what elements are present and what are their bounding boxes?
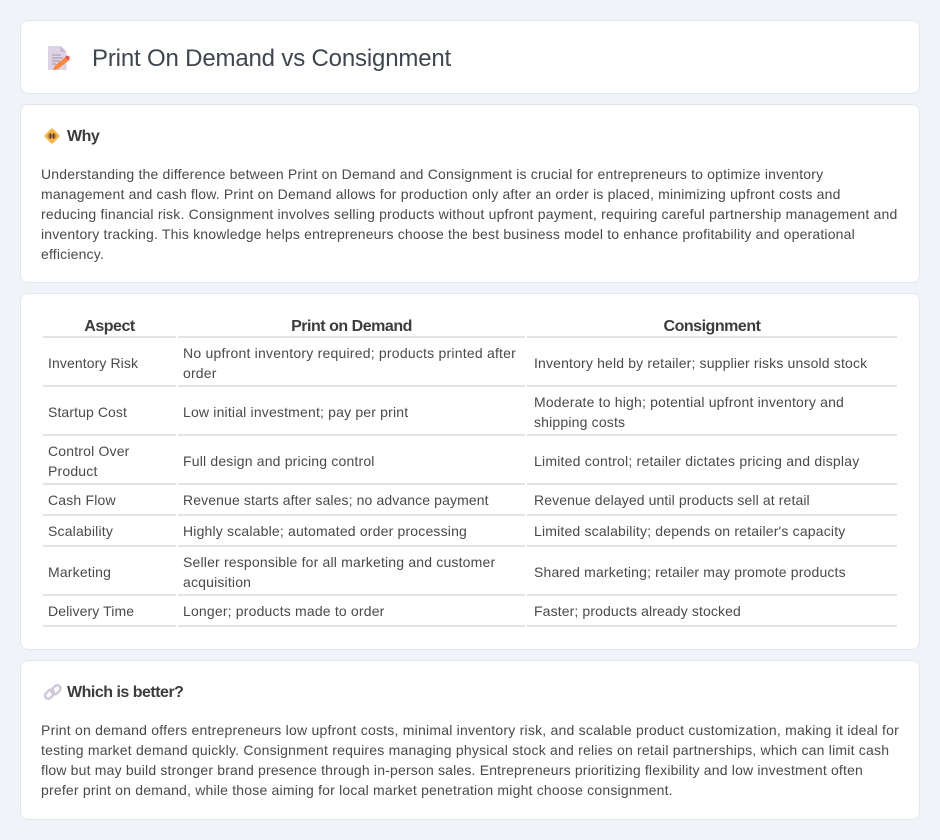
row: control over product: Control Over xyxy=(48,443,130,459)
row: startup cost: Moderate to high; potential upfront inventory and xyxy=(534,394,844,410)
row: delivery time: Delivery Time xyxy=(48,603,134,619)
row: control over product xyxy=(48,443,860,479)
row: scalability: Highly scalable; automated order processing xyxy=(183,523,467,539)
text: why paragraph xyxy=(41,166,898,262)
text: which is better paragraph: Print on demand offers entrepreneurs low upfront costs, minimal inventory risk, and scalable product customization, making it ideal for xyxy=(41,722,899,738)
text: which is better paragraph xyxy=(41,722,899,798)
text: why paragraph: efficiency. xyxy=(41,246,104,262)
table header: Print on Demand xyxy=(291,318,412,335)
text: which is better paragraph: testing market demand quickly. Consignment requires managing physical stock and relies on retail partnerships, which can limit cash xyxy=(41,742,889,758)
row: cash flow: Revenue starts after sales; no advance payment xyxy=(183,492,489,508)
row: delivery time: Faster; products already stocked xyxy=(534,603,741,619)
text: why paragraph: inventory tracking. This knowledge helps entrepreneurs choose the best business model to enhance profitability and operational xyxy=(41,226,855,242)
panel: which is better xyxy=(20,660,920,820)
row: cash flow xyxy=(48,492,810,508)
panel: why xyxy=(20,104,920,283)
panel: comparison table xyxy=(20,293,920,650)
row: inventory risk: No upfront inventory required; products printed after xyxy=(183,345,516,361)
row: inventory risk: Inventory Risk xyxy=(48,355,138,371)
row: control over product: Limited control; retailer dictates pricing and display xyxy=(534,453,859,469)
text: why paragraph: reducing financial risk. Consignment involves selling products without upfront payment, requiring careful partnership management and xyxy=(41,206,898,222)
row: marketing xyxy=(48,554,846,590)
text: why paragraph: management and cash flow. Print on Demand allows for production only after an order is placed, minimizing upfront costs and xyxy=(41,186,841,202)
row: delivery time xyxy=(48,603,741,619)
row: inventory risk: Inventory held by retailer; supplier risks unsold stock xyxy=(534,355,867,371)
row: delivery time: Longer; products made to order xyxy=(183,603,385,619)
text: why paragraph: Understanding the difference between Print on Demand and Consignment is crucial for entrepreneurs to optimize inventory xyxy=(41,166,823,182)
row: marketing: acquisition xyxy=(183,574,251,590)
row: startup cost: shipping costs xyxy=(534,414,625,430)
row: scalability: Scalability xyxy=(48,523,113,539)
row: scalability xyxy=(48,523,846,539)
row: marketing: Marketing xyxy=(48,564,111,580)
row: marketing: Seller responsible for all marketing and customer xyxy=(183,554,495,570)
row: marketing: Shared marketing; retailer may promote products xyxy=(534,564,846,580)
table header xyxy=(84,318,761,335)
table header: Aspect xyxy=(84,318,135,335)
table header: Consignment xyxy=(664,318,760,335)
row: inventory risk xyxy=(48,345,868,381)
heading: page title: Print On Demand vs Consignment xyxy=(92,45,451,72)
row: startup cost: Startup Cost xyxy=(48,404,127,420)
row: scalability: Limited scalability; depends on retailer's capacity xyxy=(534,523,845,539)
text: which is better paragraph: flow but may build stronger brand presence through in-person sales. Entrepreneurs prioritizing flexibility and low investment often xyxy=(41,762,863,778)
row: cash flow: Cash Flow xyxy=(48,492,116,508)
table: comparison xyxy=(43,318,897,627)
row: startup cost xyxy=(48,394,844,430)
heading: why: Why xyxy=(67,128,99,145)
icon: warning diamond xyxy=(44,128,60,144)
row: startup cost: Low initial investment; pay per print xyxy=(183,404,408,420)
row: control over product: Full design and pricing control xyxy=(183,453,375,469)
row: inventory risk: order xyxy=(183,365,217,381)
heading: which is better: Which is better? xyxy=(67,684,183,701)
row: cash flow: Revenue delayed until products sell at retail xyxy=(534,492,810,508)
panel: title xyxy=(20,20,920,94)
icon: chain link xyxy=(44,684,62,700)
text: which is better paragraph: prefer print on demand, while those aiming for local market penetration might choose consignment. xyxy=(41,782,673,798)
icon: document with pencil xyxy=(48,46,70,70)
row: control over product: Product xyxy=(48,463,98,479)
